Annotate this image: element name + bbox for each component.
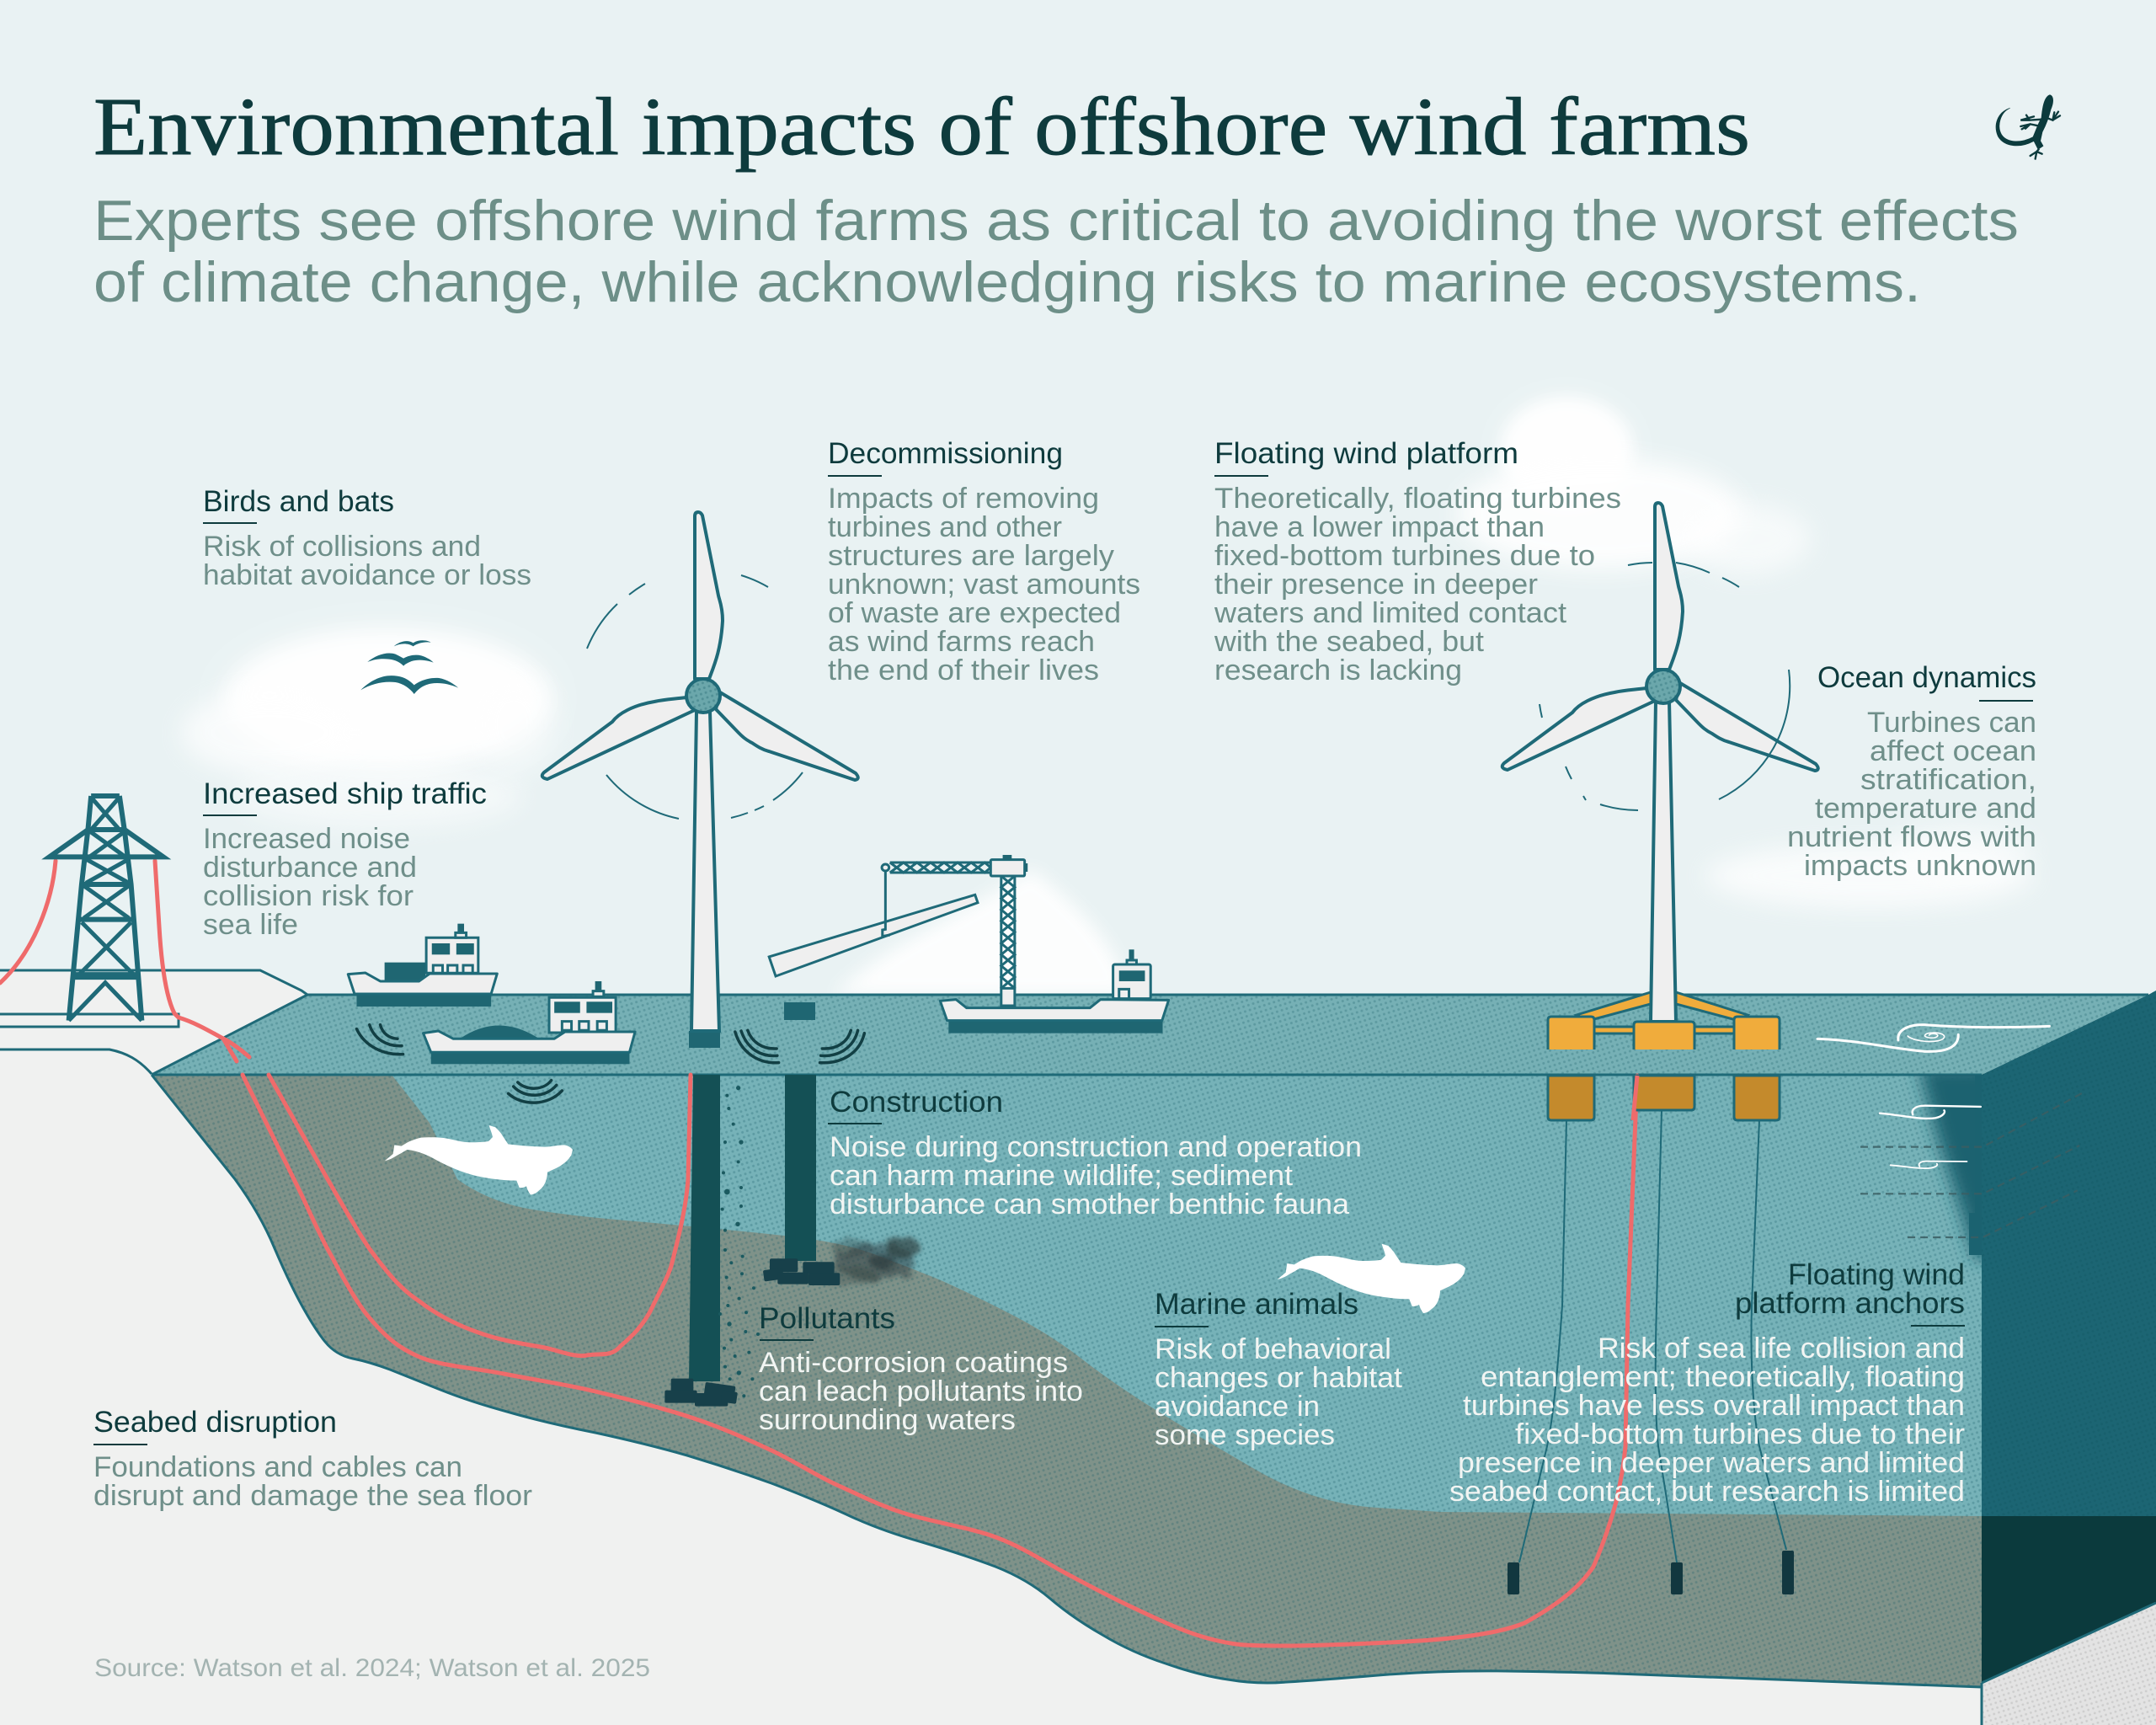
callout: ocean dynamics: affect ocean (1870, 735, 2036, 767)
installation vessel with crane (769, 855, 1169, 1033)
callout: ocean dynamics: Turbines can (1867, 707, 2036, 739)
callout: increased ship traffic: disturbance and (203, 852, 417, 884)
callout: marine animals: Risk of behavioral (1155, 1333, 1391, 1365)
callout: floating wind platform anchors: Floating wind (1788, 1258, 1965, 1291)
callout: floating wind platform anchors: entanglement; theoretically, floating (1481, 1361, 1965, 1393)
callout: increased ship traffic: Increased ship traffic (203, 777, 487, 810)
callout: construction: can harm marine wildlife; sediment (830, 1160, 1294, 1192)
monopile below-water base block (689, 1031, 720, 1048)
scour rocks: construction pile (763, 1258, 840, 1285)
callout: floating wind platform anchors (1449, 1258, 1965, 1508)
callout: marine animals: Marine animals (1155, 1288, 1358, 1321)
callout: floating wind platform: Theoretically, floating turbines (1214, 483, 1621, 515)
callout: marine animals: avoidance in (1155, 1391, 1320, 1423)
callout: decommissioning: structures are largely (828, 540, 1114, 572)
callout: seabed disruption: Foundations and cables can (93, 1451, 462, 1483)
rotation arcs: first turbine (587, 575, 803, 819)
callout: ocean dynamics (1787, 661, 2036, 882)
callout: pollutants: surrounding waters (759, 1404, 1016, 1436)
floating platform (1548, 992, 1780, 1120)
callout: floating wind platform: their presence in deeper (1214, 569, 1538, 601)
callout: decommissioning: the end of their lives (828, 654, 1099, 686)
callout: floating wind platform (1214, 437, 1621, 686)
callout: floating wind platform anchors: seabed contact, but research is limited (1449, 1476, 1965, 1508)
callout: floating wind platform anchors: platform anchors (1735, 1287, 1965, 1320)
land outlines (0, 970, 307, 1074)
callout: floating wind platform anchors: Risk of sea life collision and (1598, 1332, 1965, 1365)
callout: pollutants (759, 1302, 1083, 1436)
callout: floating wind platform anchors: presence in deeper waters and limited (1458, 1447, 1965, 1479)
callout: increased ship traffic (203, 777, 487, 941)
icon: ocean swirls (1817, 1025, 2049, 1168)
callout: floating wind platform: waters and limited contact (1214, 597, 1567, 629)
callout: decommissioning: as wind farms reach (828, 626, 1095, 658)
dashed water layer lines (1860, 1092, 2084, 1237)
callout: decommissioning: unknown; vast amounts (828, 569, 1140, 601)
source: Source: Watson et al. 2024; Watson et al. 2025 (94, 1654, 650, 1682)
callout: construction: Noise during construction and operation (830, 1131, 1362, 1163)
construction pile (785, 1075, 816, 1261)
construction pile at surface (784, 1002, 815, 1020)
callout: decommissioning (828, 437, 1140, 686)
callout: decommissioning: Impacts of removing (828, 483, 1099, 515)
callout: birds and bats: Risk of collisions and (203, 531, 481, 563)
seabed anchors (1508, 1551, 1794, 1594)
callout: marine animals (1155, 1288, 1403, 1451)
callout: pollutants: Pollutants (759, 1302, 895, 1335)
power cables (0, 861, 1637, 1646)
callout: construction: Construction (830, 1086, 1003, 1119)
pylon (50, 796, 163, 1021)
shadow blending into the front water (1919, 1065, 1996, 1259)
whale near ships (385, 1125, 573, 1194)
callout: seabed disruption: Seabed disruption (93, 1406, 337, 1439)
subtitle: of climate change, while acknowledging risks to marine ecosystems. (93, 250, 1921, 314)
ocean: top surface (152, 995, 2148, 1075)
callout: increased ship traffic: collision risk for (203, 880, 414, 912)
callout: floating wind platform anchors: turbines have less overall impact than (1463, 1390, 1965, 1422)
callout: increased ship traffic: sea life (203, 909, 298, 941)
callout: birds and bats: habitat avoidance or loss (203, 559, 531, 591)
callout: marine animals: changes or habitat (1155, 1362, 1403, 1394)
callout: floating wind platform: with the seabed, but (1214, 626, 1485, 658)
dome cargo ship (424, 981, 635, 1064)
callout: floating wind platform anchors: fixed-bottom turbines due to their (1515, 1418, 1965, 1450)
sediment plume (814, 1238, 921, 1286)
subtitle (93, 189, 2019, 314)
pollutant droplets (718, 1086, 760, 1397)
callout: floating wind platform: research is lacking (1214, 654, 1462, 686)
turbine with monopile (542, 512, 858, 1031)
callout: construction (828, 1086, 1362, 1220)
callout: decommissioning: turbines and other (828, 511, 1062, 543)
callout: floating wind platform: Floating wind platform (1214, 437, 1518, 470)
callout: increased ship traffic: Increased noise (203, 823, 410, 855)
callout: ocean dynamics: temperature and (1815, 793, 2036, 825)
callout: ocean dynamics: stratification, (1860, 764, 2036, 796)
mooring lines (1519, 1110, 1786, 1562)
fixed turbine foundation: monopile (689, 1075, 720, 1381)
noise waves around construction pile (735, 1030, 864, 1063)
callout: ocean dynamics: nutrient flows with (1787, 821, 2036, 853)
callout: ocean dynamics: impacts unknown (1804, 850, 2036, 882)
callout: floating wind platform: fixed-bottom turbines due to (1214, 540, 1595, 572)
callout: seabed disruption (93, 1406, 532, 1512)
callout: marine animals: some species (1155, 1419, 1335, 1451)
scour rocks: monopile (664, 1379, 738, 1407)
rotation arcs: floating turbine (1540, 563, 1790, 810)
noise waves (356, 1025, 562, 1103)
seabed cross-section (152, 1075, 1982, 1687)
icon: gecko logo (1996, 95, 2060, 159)
callout: birds and bats: Birds and bats (203, 485, 394, 518)
callout: pollutants: can leach pollutants into (759, 1375, 1083, 1407)
callout: pollutants: Anti-corrosion coatings (759, 1347, 1068, 1379)
callout: construction: disturbance can smother benthic fauna (830, 1188, 1349, 1220)
callout: decommissioning: of waste are expected (828, 597, 1121, 629)
icon: birds (360, 640, 458, 694)
callout: decommissioning: Decommissioning (828, 437, 1063, 470)
subtitle: Experts see offshore wind farms as critical to avoiding the worst effects (93, 189, 2019, 253)
callout: ocean dynamics: Ocean dynamics (1817, 661, 2036, 694)
clouds (181, 396, 2034, 996)
floating turbine (1502, 503, 1818, 1022)
ocean: shaded right side (1982, 991, 2156, 1725)
callout: seabed disruption: disrupt and damage the sea floor (93, 1480, 532, 1512)
cargo ship (348, 924, 497, 1007)
callout: birds and bats (203, 485, 531, 591)
ocean: front water (152, 1075, 1982, 1516)
land (0, 970, 2156, 1725)
whale mid ocean (1278, 1244, 1465, 1313)
title: Environmental impacts of offshore wind farms (93, 82, 1750, 173)
callout: floating wind platform: have a lower impact than (1214, 511, 1545, 543)
